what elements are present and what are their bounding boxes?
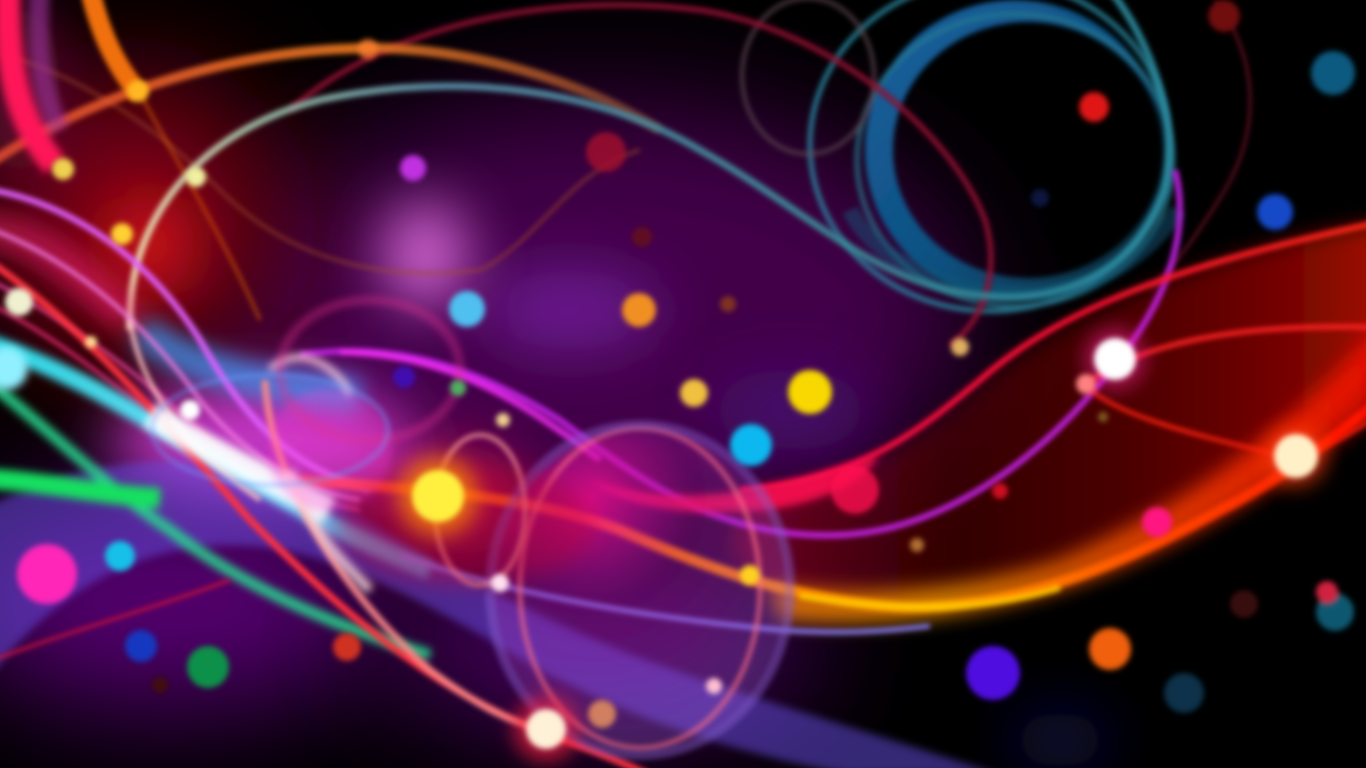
- magenta ribbon: [590, 455, 880, 513]
- top arc orange: [0, 0, 660, 320]
- thin red arcs: [0, 0, 1250, 345]
- purple streams: [0, 170, 1180, 535]
- wide red-orange ribbon: [730, 220, 1366, 623]
- white hot stream core: [150, 357, 370, 590]
- translucent spheres: [152, 300, 790, 755]
- rings: blue top right: [742, 0, 1178, 311]
- cyan and green streams: [0, 340, 430, 655]
- pink-red descending streams: [0, 255, 680, 768]
- orange main stream: [300, 385, 1366, 607]
- blue-violet haze: [0, 230, 360, 395]
- purple-blue wide ribbon: [0, 461, 1000, 768]
- left pink ribbons: [8, 0, 60, 165]
- red wave: [740, 218, 1366, 490]
- white glowing nodes: [0, 329, 1326, 761]
- teal arc: [130, 0, 1169, 330]
- glow: pink burst: [0, 0, 530, 555]
- thin blue continuation: [400, 555, 930, 632]
